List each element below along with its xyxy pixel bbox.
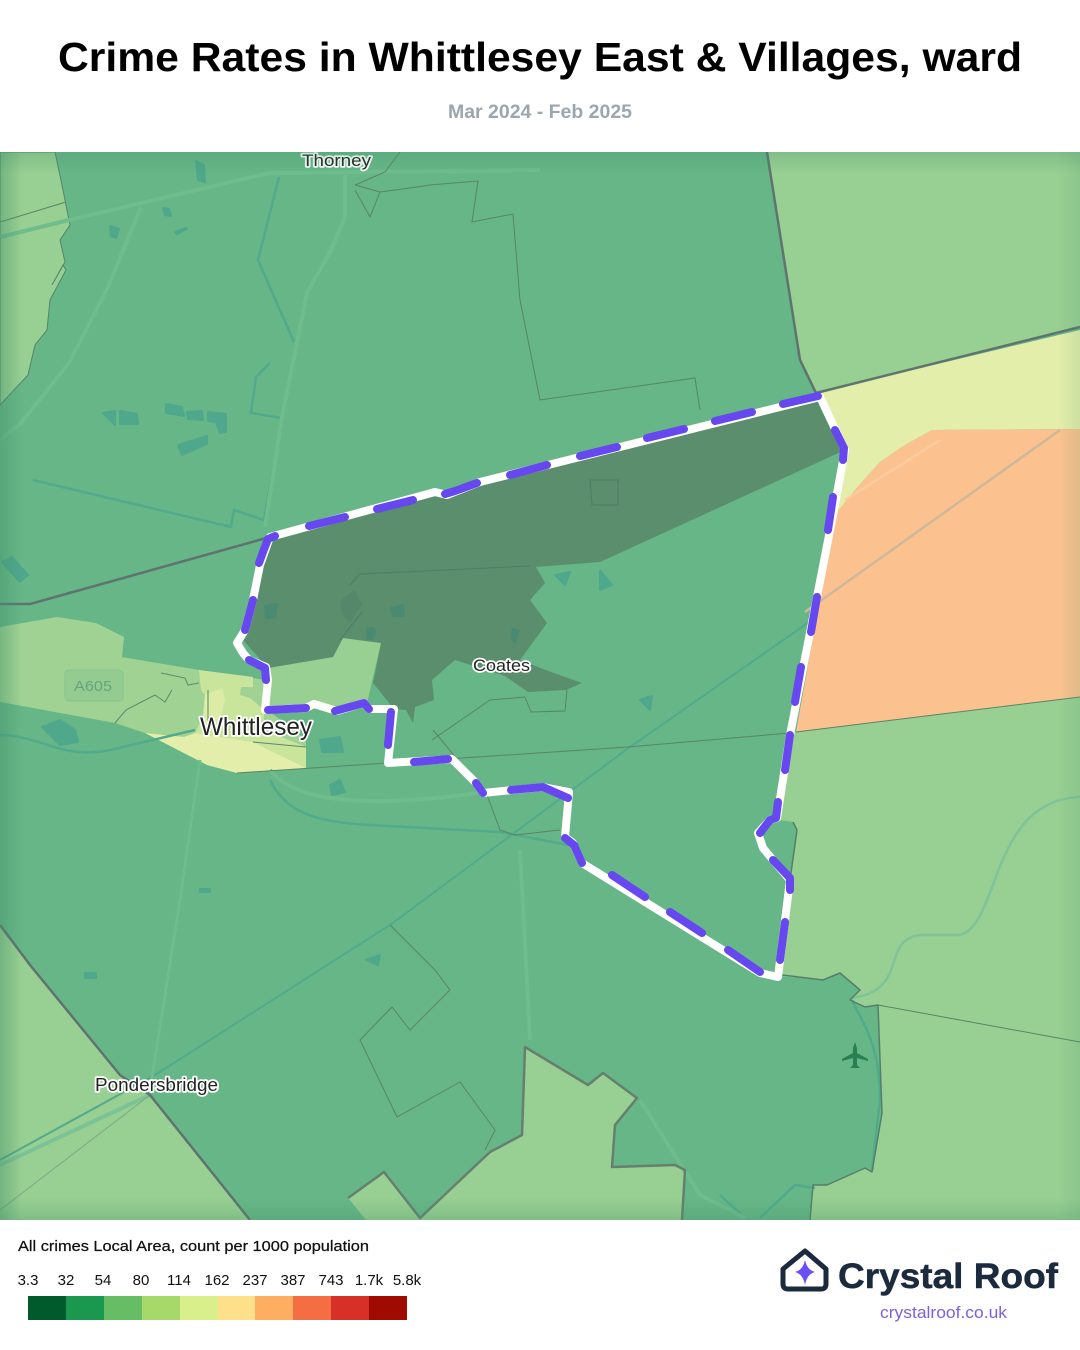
region: pale yellow east xyxy=(816,330,1080,515)
legend colour swatches xyxy=(28,1296,407,1320)
place label: Thorney: Thorney xyxy=(302,151,372,170)
place label: Whittlesey: Whittlesey xyxy=(200,713,312,741)
legend scale labels xyxy=(18,1272,422,1289)
place label: Pondersbridge: Pondersbridge xyxy=(95,1075,218,1095)
region: north-west light green xyxy=(0,152,70,405)
ward boundary: white base with dashed purple xyxy=(237,396,845,977)
purple dashes xyxy=(245,396,844,972)
legend scale labels: 80 xyxy=(133,1272,149,1289)
region: north-east light green xyxy=(767,152,1080,393)
legend scale labels: 387 xyxy=(280,1272,306,1289)
roads xyxy=(0,170,745,1218)
road label: A605 xyxy=(65,670,123,701)
legend scale labels: 3.3 xyxy=(18,1272,38,1289)
subtitle: date range: Mar 2024 - Feb 2025 xyxy=(448,102,632,123)
region: south-west light green xyxy=(0,925,250,1220)
legend scale labels: 162 xyxy=(204,1272,230,1289)
ponds and details inside dark ward xyxy=(264,603,520,644)
title: Crime Rates in Whittlesey East & Villages, ward xyxy=(58,34,1022,80)
website url: crystalroof.co.uk xyxy=(880,1303,1008,1322)
road label: A605: A605 xyxy=(74,678,112,695)
region: orange high crime xyxy=(796,429,1080,732)
icon: airport plane xyxy=(842,1042,868,1068)
region: east light green xyxy=(778,697,1080,1042)
ponds xyxy=(2,161,652,978)
map panel xyxy=(0,151,1080,1220)
region: south-middle light green xyxy=(348,1047,685,1220)
region: Whittlesey town xyxy=(0,617,306,773)
heavy boundaries xyxy=(0,152,1080,1220)
legend scale labels: 5.8k xyxy=(393,1272,422,1289)
logo wordmark: Crystal Roof xyxy=(838,1257,1058,1296)
logo: Crystal Roof xyxy=(783,1251,1058,1322)
legend scale labels: 1.7k xyxy=(355,1272,384,1289)
region: dark ward centre xyxy=(243,397,845,723)
region: Whittlesey east block xyxy=(265,638,381,711)
legend xyxy=(18,1238,422,1320)
legend scale labels: 32 xyxy=(58,1272,74,1289)
place label: Coates: Coates xyxy=(473,656,530,675)
legend scale labels: 743 xyxy=(318,1272,344,1289)
legend scale labels: 114 xyxy=(167,1272,191,1289)
water channels xyxy=(0,177,1080,1218)
legend scale labels: 237 xyxy=(242,1272,268,1289)
region: south-east light green xyxy=(810,1005,1080,1220)
icon: house outline with star xyxy=(783,1251,826,1289)
legend scale labels: 54 xyxy=(95,1272,111,1289)
legend title: All crimes Local Area, count per 1000 population xyxy=(18,1238,369,1255)
thin area boundaries xyxy=(0,152,1080,1150)
